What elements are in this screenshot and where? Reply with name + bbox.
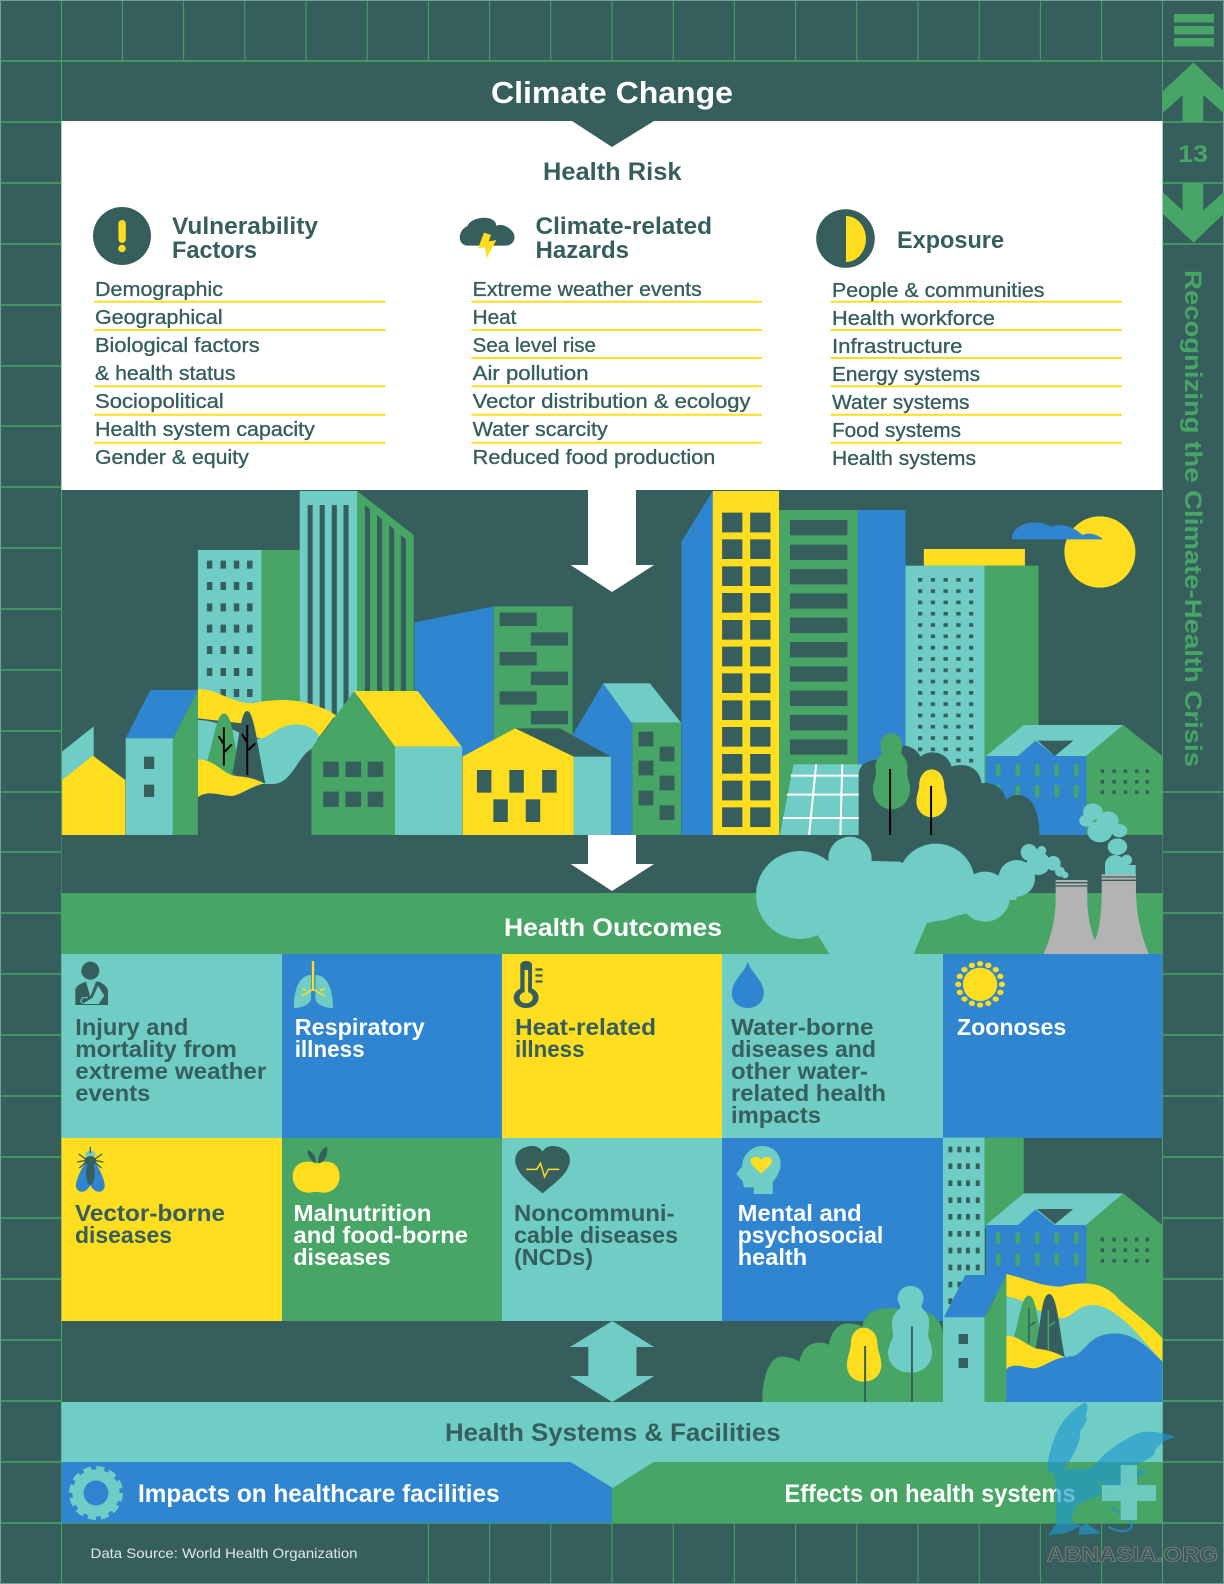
label: psychosocial <box>738 1222 883 1248</box>
green bushes <box>762 1308 943 1402</box>
icon: down arrow <box>1162 183 1224 243</box>
panel: health risk <box>62 121 1162 490</box>
blue roof house <box>126 690 198 835</box>
icon: insect <box>76 1147 105 1192</box>
green house with yellow roof <box>311 691 462 835</box>
illustration: lower city <box>762 1138 1162 1402</box>
label: diseases and <box>731 1036 876 1062</box>
heading: health risk: Health Risk <box>543 158 682 186</box>
column: climate-related hazards <box>460 213 762 469</box>
list: vulnerability factors: Demographic <box>95 278 223 301</box>
label: health <box>738 1244 807 1270</box>
band: health outcomes <box>62 893 1162 954</box>
list: vulnerability factors: Sociopolitical <box>95 390 224 413</box>
list: vulnerability factors: Health system capacity <box>95 418 316 441</box>
heading: climate-related hazards: Climate-related <box>536 213 712 240</box>
page number: 13 <box>1178 141 1208 168</box>
list: exposure: Food systems <box>832 419 961 442</box>
heading: health systems and facilities: Health Systems & Facilities <box>445 1419 781 1447</box>
list: climate-related hazards <box>472 278 762 469</box>
label: Impacts on healthcare facilities <box>138 1480 500 1508</box>
icon: half circle <box>816 209 875 268</box>
label: Mental and <box>738 1200 862 1226</box>
label <box>75 1014 266 1106</box>
label: impacts <box>731 1102 821 1128</box>
list: climate-related hazards: Extreme weather events <box>473 278 702 301</box>
dotted tower <box>906 549 1039 799</box>
illustration: smoke and cooling towers <box>756 837 1149 955</box>
label: mortality from <box>75 1036 237 1062</box>
arrow: to impacts and effects <box>571 1462 653 1488</box>
label: Respiratory <box>295 1014 425 1040</box>
icon: water drop <box>732 962 764 1008</box>
arrow: to health outcomes <box>571 835 654 891</box>
label: and food-borne <box>294 1222 468 1248</box>
list: vulnerability factors: & health status <box>95 362 236 385</box>
hills and trees lower <box>1006 1274 1162 1402</box>
yellow tree lower <box>847 1328 881 1402</box>
label: related health <box>731 1080 886 1106</box>
label: extreme weather <box>75 1058 266 1084</box>
label <box>294 1200 468 1270</box>
teal tree lower <box>888 1286 932 1402</box>
label <box>731 1014 886 1128</box>
yellow house <box>463 728 611 835</box>
label: cable diseases <box>514 1222 678 1248</box>
icon: gear <box>72 1468 120 1518</box>
label: Vector-borne <box>75 1200 225 1226</box>
icon: up arrow <box>1162 62 1224 122</box>
illustration: city left <box>62 491 681 835</box>
list: exposure: Water systems <box>832 391 970 414</box>
blue roof house lower <box>943 1275 1006 1402</box>
column: vulnerability factors <box>93 207 386 469</box>
label <box>75 1200 225 1248</box>
solar panel <box>780 764 862 835</box>
label: events <box>75 1080 150 1106</box>
label: Malnutrition <box>294 1200 432 1226</box>
factory house lower <box>986 1193 1162 1402</box>
blue and green office <box>415 606 573 757</box>
panel: effects on health systems <box>612 1462 1162 1523</box>
sidebar title: Recognizing the Climate-Health Crisis <box>1179 270 1206 767</box>
icon: heart with pulse <box>515 1146 570 1193</box>
arrow: city down <box>571 490 654 592</box>
hills and trees <box>198 689 336 797</box>
green and blue office <box>779 510 906 835</box>
smoke cloud <box>756 837 1136 955</box>
illustration: city right <box>681 491 1162 835</box>
label: Injury and <box>75 1014 188 1040</box>
list: vulnerability factors: Biological factors <box>95 334 260 357</box>
factory house <box>986 725 1162 835</box>
arrow: from climate change <box>572 121 654 147</box>
illustration: stack smoke <box>1079 803 1127 855</box>
title: Climate Change <box>491 75 733 110</box>
band: dark connector <box>62 835 1162 893</box>
list: vulnerability factors: Geographical <box>95 306 223 329</box>
list: climate-related hazards: Air pollution <box>473 362 589 385</box>
icon: storm cloud <box>460 218 515 258</box>
heading: exposure: Exposure <box>897 227 1004 254</box>
green tree <box>873 733 910 835</box>
heading: health outcomes: Health Outcomes <box>504 914 722 942</box>
icon: head with heart <box>736 1146 781 1194</box>
cell: malnutrition <box>282 1138 502 1321</box>
icon: menu <box>1174 14 1214 46</box>
label: (NCDs) <box>514 1244 593 1270</box>
band: health systems and facilities <box>62 1402 1162 1462</box>
label <box>515 1014 656 1062</box>
icon: virus <box>955 961 1005 1008</box>
cell: heat-related illness <box>502 954 722 1138</box>
list: climate-related hazards: Sea level rise <box>473 334 596 357</box>
cell: vector-borne diseases <box>62 1138 282 1321</box>
list: exposure: Infrastructure <box>832 335 962 358</box>
sidebar navigation <box>1162 14 1224 767</box>
label: illness <box>295 1036 365 1062</box>
column: exposure <box>816 209 1122 470</box>
list: exposure: People & communities <box>832 279 1044 302</box>
sun and cloud <box>1012 516 1135 588</box>
list: exposure: Health systems <box>832 447 976 470</box>
dotted tower lower <box>943 1138 1024 1318</box>
label <box>514 1200 678 1270</box>
list: climate-related hazards: Reduced food production <box>473 446 715 469</box>
arrow: two-way <box>570 1321 654 1402</box>
heading: climate-related hazards <box>536 213 712 264</box>
panel: health outcomes grid <box>62 954 1162 1321</box>
label: diseases <box>294 1244 390 1270</box>
label: other water- <box>731 1058 868 1084</box>
label: Water-borne <box>731 1014 874 1040</box>
heading: vulnerability factors <box>172 213 319 264</box>
label: Noncommuni- <box>514 1200 674 1226</box>
cell: zoonoses <box>943 954 1162 1138</box>
heading: climate-related hazards: Hazards <box>536 237 629 264</box>
icon: exclamation <box>93 207 151 265</box>
watermark text: ABNASIA.ORG <box>1047 1544 1218 1566</box>
blue gable house <box>573 683 681 835</box>
cell: injury and mortality <box>62 954 282 1138</box>
cell: mental health <box>722 1138 943 1321</box>
yellow tower <box>681 491 779 835</box>
list: vulnerability factors <box>94 278 386 469</box>
label: illness <box>515 1036 584 1062</box>
icon: apple <box>293 1147 340 1193</box>
griffin mark <box>1047 1403 1175 1535</box>
heading: vulnerability factors: Factors <box>172 237 257 264</box>
cooling towers <box>1043 874 1149 954</box>
label: diseases <box>75 1222 172 1248</box>
yellow house with teal gable <box>62 726 125 835</box>
label: Effects on health systems <box>784 1480 1076 1508</box>
tall teal building <box>198 550 300 707</box>
panel: impacts on healthcare facilities <box>62 1462 612 1523</box>
label <box>295 1014 425 1062</box>
watermark <box>1047 1403 1218 1566</box>
cell: water-borne diseases <box>722 954 943 1138</box>
list: exposure: Energy systems <box>832 363 980 386</box>
list: exposure <box>831 279 1122 470</box>
yellow tree <box>916 769 947 835</box>
cell: noncommunicable diseases <box>502 1138 722 1321</box>
label <box>738 1200 883 1270</box>
list: exposure: Health workforce <box>832 307 995 330</box>
icon: lungs <box>294 961 333 1008</box>
list: climate-related hazards: Vector distribution & ecology <box>473 390 751 413</box>
dark bushes <box>859 746 1039 835</box>
label: Zoonoses <box>957 1014 1066 1040</box>
list: vulnerability factors: Gender & equity <box>95 446 250 469</box>
data source: Data Source: World Health Organization <box>90 1545 358 1561</box>
cross mark <box>1102 1465 1156 1520</box>
icon: thermometer <box>514 961 543 1008</box>
list: climate-related hazards: Heat <box>473 306 517 329</box>
icon: injured person <box>75 962 108 1005</box>
cell: respiratory illness <box>282 954 502 1138</box>
list: climate-related hazards: Water scarcity <box>473 418 608 441</box>
label: Heat-related <box>515 1014 656 1040</box>
striped tower <box>300 491 414 718</box>
heading: vulnerability factors: Vulnerability <box>172 213 319 240</box>
